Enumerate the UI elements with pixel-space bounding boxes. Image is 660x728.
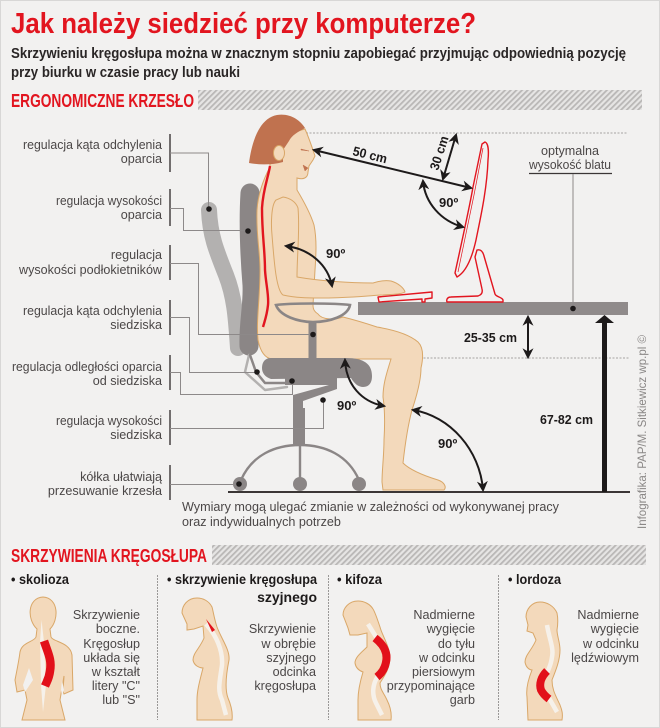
section heading: ergonomiczne krzesło: ERGONOMICZNE KRZESŁO xyxy=(11,91,194,111)
panel: skrzywienie kręgosłupa szyjnego: szyjnego xyxy=(257,589,317,605)
section heading: ergonomiczne krzesło xyxy=(11,90,642,111)
monitor xyxy=(447,142,503,302)
callout: backrest distance: od siedziska xyxy=(93,374,162,388)
credit: Infografika: PAP/M. Sitkiewicz wp.pl © xyxy=(635,335,649,529)
description xyxy=(249,622,316,693)
panel: lordoza xyxy=(508,571,639,720)
panel: lordoza: • lordoza xyxy=(508,571,561,587)
panel: skolioza: • skolioza xyxy=(11,571,69,587)
measurement labels: 50 cm xyxy=(351,143,389,166)
arrow: screen angle xyxy=(423,181,463,227)
arm gaps xyxy=(23,668,64,696)
callout: seat height xyxy=(56,397,326,445)
section heading: skrzywienia kręgosłupa xyxy=(11,545,646,566)
callout: backrest distance xyxy=(12,355,295,394)
measurement labels: 90º xyxy=(438,436,457,451)
callout: wheels: przesuwanie krzesła xyxy=(48,484,162,498)
chair: backrest positions xyxy=(209,193,287,390)
description: lub "S" xyxy=(102,693,140,707)
description: szyjnego xyxy=(266,651,316,665)
measurement labels: 67-82 cm xyxy=(540,412,593,427)
ear xyxy=(274,146,284,160)
callout: seat height: regulacja wysokości xyxy=(56,414,162,428)
arm xyxy=(271,197,405,298)
curve xyxy=(206,619,215,632)
description: układa się xyxy=(83,651,140,665)
description: do tyłu xyxy=(438,637,475,651)
description: wygięcie xyxy=(590,622,639,636)
callout: armrest height: regulacja xyxy=(111,248,162,262)
note: oraz indywidualnych potrzeb xyxy=(182,515,341,529)
subtitle: przy biurku w czasie pracy lub nauki xyxy=(11,64,240,81)
figure: hunched back xyxy=(343,601,391,720)
description: piersiowym xyxy=(412,665,475,679)
measurement labels: 25-35 cm xyxy=(464,330,517,345)
description: w obrębie xyxy=(260,637,316,651)
callout: backrest height: oparcia xyxy=(121,208,162,222)
spine xyxy=(368,624,382,715)
callout: backrest angle: regulacja kąta odchylenia xyxy=(23,138,162,152)
callout: backrest height xyxy=(56,189,251,234)
spine xyxy=(262,166,270,327)
figure: lumbar curvature xyxy=(525,602,562,720)
callout: backrest distance: regulacja odległości oparcia xyxy=(12,360,162,374)
description: lędźwiowym xyxy=(571,651,639,665)
callout: optimal desk height: optymalna xyxy=(541,144,599,158)
description: odcinka xyxy=(273,665,316,679)
keyboard xyxy=(378,292,432,302)
measurement arrows xyxy=(286,135,528,490)
curve xyxy=(375,638,387,677)
measurement labels: 90º xyxy=(439,195,458,210)
spine xyxy=(40,620,46,712)
lips and eye xyxy=(301,149,309,171)
panel: kifoza xyxy=(337,571,475,720)
callout: seat height: siedziska xyxy=(110,428,162,442)
note xyxy=(182,500,560,529)
description: w odcinku xyxy=(582,637,639,651)
callout: wheels: kółka ułatwiają xyxy=(80,470,162,484)
callout: seat angle: regulacja kąta odchylenia xyxy=(23,304,162,318)
figure: neck curvature xyxy=(182,598,232,720)
arrow: 25-35 cm xyxy=(527,317,529,357)
table height arrow xyxy=(595,315,614,492)
description: Nadmierne xyxy=(413,608,475,622)
description: wygięcie xyxy=(426,622,475,636)
description xyxy=(571,608,639,665)
arrow: knee angle xyxy=(413,410,483,490)
callout: armrest height xyxy=(18,245,316,337)
hair xyxy=(249,115,305,164)
description: w odcinku xyxy=(418,651,475,665)
panel: skrzywienie kręgosłupa szyjnego xyxy=(167,571,317,720)
description: Skrzywienie xyxy=(249,622,316,636)
callout: optimal desk height: wysokość blatu xyxy=(528,158,611,172)
callout: wheels xyxy=(48,465,242,500)
reference dotted lines xyxy=(306,133,630,358)
callout: backrest height: regulacja wysokości xyxy=(56,194,162,208)
measurement labels: 30 cm xyxy=(427,134,452,172)
description: Skrzywienie xyxy=(73,608,140,622)
chair: armrest xyxy=(276,304,350,359)
measurement labels: 90º xyxy=(326,246,345,261)
callout: optimal desk height xyxy=(528,144,612,311)
chair: seat and base xyxy=(233,358,372,491)
curve xyxy=(540,671,549,699)
arrow: elbow angle xyxy=(286,246,332,286)
panel: kifoza: • kifoza xyxy=(337,571,382,587)
arrow: hip angle xyxy=(345,360,384,406)
section heading: skrzywienia kręgosłupa: SKRZYWIENIA KRĘGOSŁUPA xyxy=(11,546,207,566)
panel: skolioza xyxy=(11,571,140,720)
spine xyxy=(206,624,226,715)
description xyxy=(387,608,475,707)
subtitle xyxy=(11,45,626,81)
dividers xyxy=(158,575,498,720)
description: Nadmierne xyxy=(577,608,639,622)
figure: seated woman xyxy=(249,115,445,490)
callout: seat angle xyxy=(23,300,260,375)
arrow: 50 cm distance xyxy=(314,150,471,188)
spine xyxy=(547,625,557,712)
curve xyxy=(44,641,51,686)
description: litery "C" xyxy=(92,679,140,693)
measurement labels xyxy=(326,134,593,451)
measurement labels: 90º xyxy=(337,398,356,413)
callout: backrest angle xyxy=(23,134,212,212)
desk xyxy=(358,302,628,315)
callout: backrest angle: oparcia xyxy=(121,152,162,166)
figure: back view xyxy=(15,597,73,720)
description: kręgosłupa xyxy=(254,679,316,693)
description: garb xyxy=(450,693,475,707)
title: Jak należy siedzieć przy komputerze? xyxy=(11,8,476,40)
arrow: 30 cm xyxy=(443,135,456,179)
panel: skrzywienie kręgosłupa szyjnego: • skrzywienie kręgosłupa xyxy=(167,571,317,587)
description: w kształt xyxy=(91,665,140,679)
description: boczne. xyxy=(96,622,140,636)
callout: seat angle: siedziska xyxy=(110,318,162,332)
ground line xyxy=(228,491,630,493)
description: Kręgosłup xyxy=(83,637,140,651)
description: przypominające xyxy=(387,679,475,693)
note: Wymiary mogą ulegać zmianie w zależności od wykonywanej pracy xyxy=(182,500,560,514)
callout: armrest height: wysokości podłokietników xyxy=(18,263,163,277)
description xyxy=(73,608,140,707)
